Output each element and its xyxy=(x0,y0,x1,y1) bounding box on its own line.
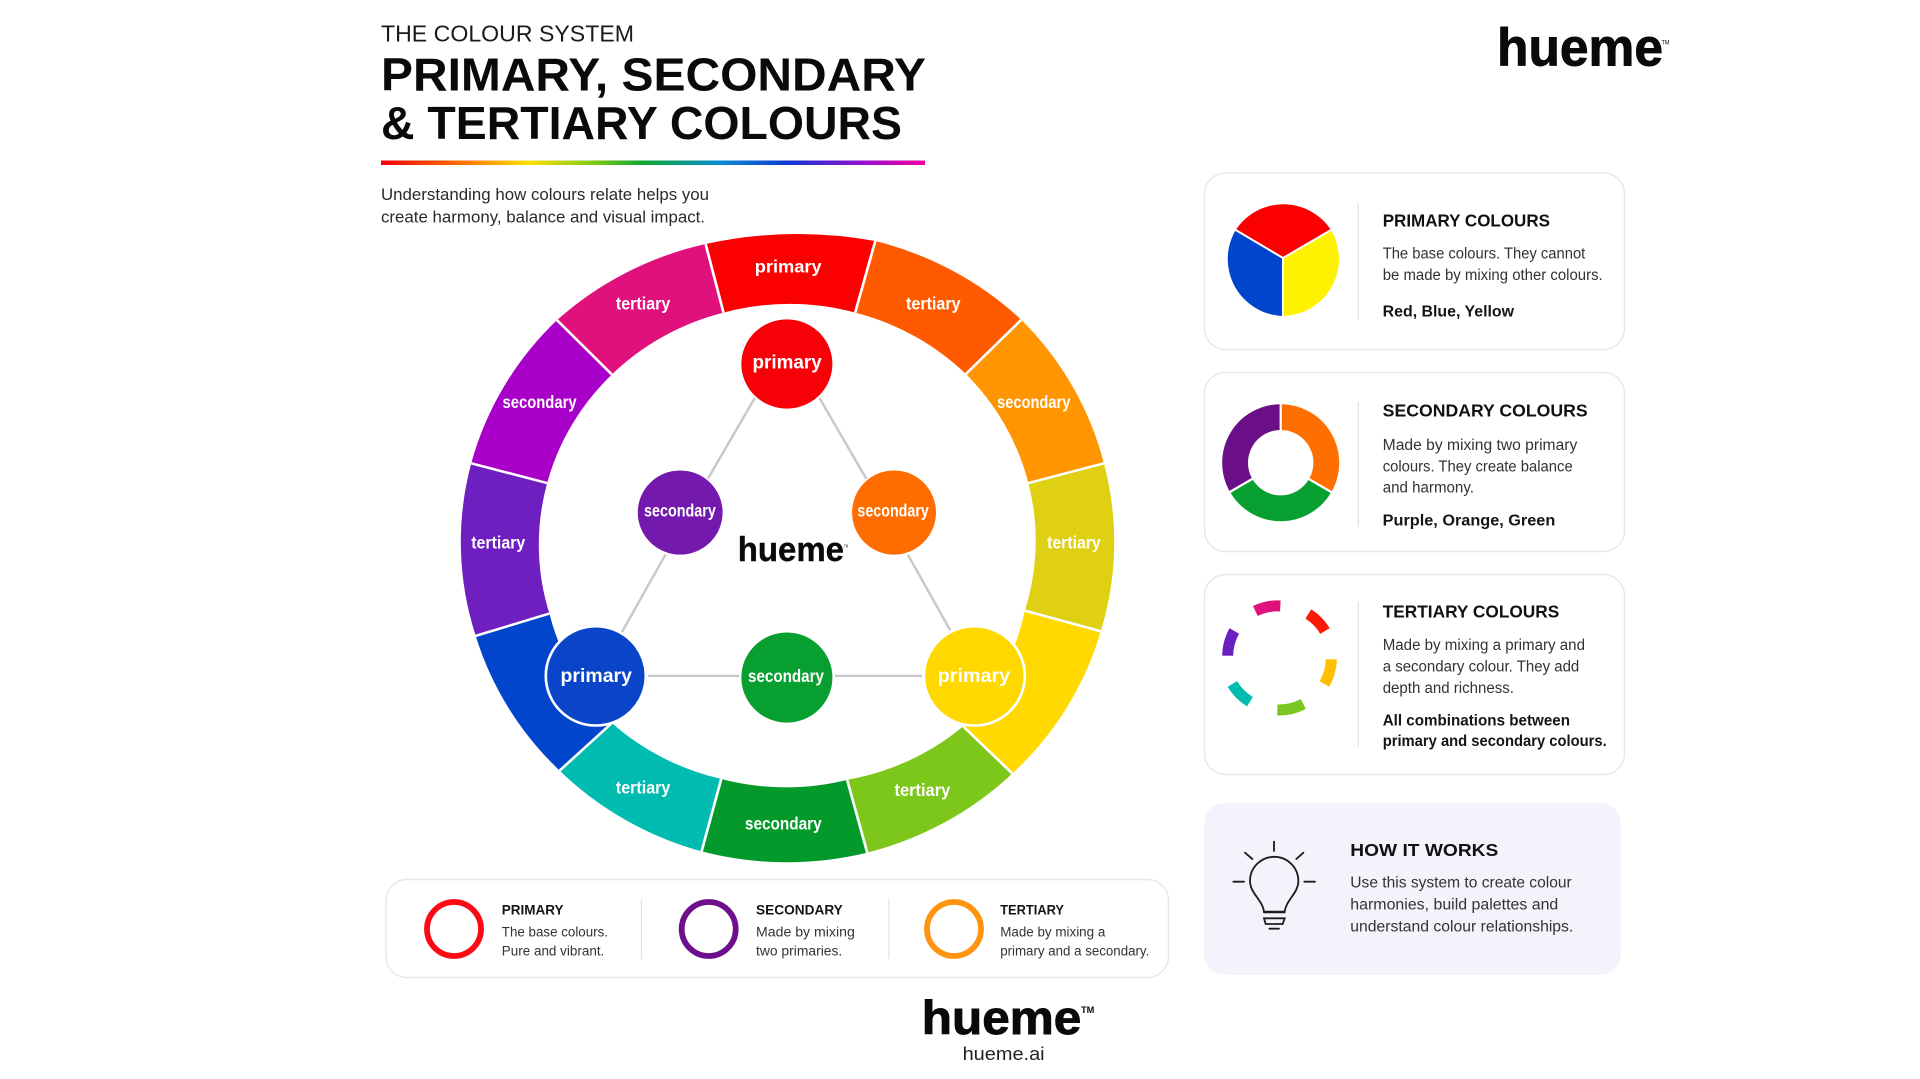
node: secondary purple: secondary xyxy=(644,501,716,521)
wheel ring labels: secondary xyxy=(503,393,577,412)
intro text xyxy=(381,186,709,227)
legend item: primary: PRIMARY xyxy=(502,901,564,917)
node: primary red xyxy=(741,319,832,409)
tertiary text: a secondary colour. They add xyxy=(1383,658,1579,675)
subtitle: the colour system: THE COLOUR SYSTEM xyxy=(381,21,634,47)
node: secondary purple xyxy=(638,470,723,555)
wheel ring labels: tertiary xyxy=(471,533,525,553)
panel: tertiary colours xyxy=(1204,574,1624,774)
node: primary red: primary xyxy=(753,352,822,373)
wheel ring labels: secondary xyxy=(997,393,1070,412)
node: primary blue: primary xyxy=(561,666,633,687)
segment: secondary green xyxy=(702,779,867,862)
legend item: tertiary: TERTIARY xyxy=(1000,901,1065,917)
wheel ring labels: tertiary xyxy=(616,294,670,314)
logo: hueme footer: TM xyxy=(1081,1005,1094,1016)
secondary text: SECONDARY COLOURS xyxy=(1383,401,1588,421)
footer url: hueme.ai xyxy=(963,1043,1045,1064)
logo: hueme footer: hueme xyxy=(922,991,1081,1044)
segment: secondary orange xyxy=(966,320,1104,483)
icon: primary pie xyxy=(1228,204,1339,316)
node: primary yellow xyxy=(924,626,1025,726)
legend item: primary: The base colours. xyxy=(502,925,608,940)
icon: light bulb xyxy=(1233,842,1315,929)
secondary text: colours. They create balance xyxy=(1383,458,1573,475)
tertiary text xyxy=(1383,601,1607,750)
how it works text: HOW IT WORKS xyxy=(1350,840,1498,860)
legend item: tertiary: Made by mixing a xyxy=(1000,925,1106,940)
segment: tertiary magenta xyxy=(557,244,723,374)
tertiary text: primary and secondary colours. xyxy=(1383,733,1607,750)
secondary text: Made by mixing two primary xyxy=(1383,437,1578,454)
primary text: The base colours. They cannot xyxy=(1383,246,1586,263)
logo: hueme top right: TM xyxy=(1662,40,1670,46)
rainbow rule xyxy=(381,160,925,165)
wheel ring labels: tertiary xyxy=(894,780,950,800)
legend panel xyxy=(386,880,1168,978)
tertiary text: Made by mixing a primary and xyxy=(1383,637,1585,654)
secondary text xyxy=(1383,401,1588,529)
wheel ring labels: secondary xyxy=(745,814,822,833)
tertiary text: depth and richness. xyxy=(1383,680,1514,697)
how it works text xyxy=(1350,840,1573,935)
legend item: secondary: SECONDARY xyxy=(756,901,843,917)
how it works text: Use this system to create colour xyxy=(1350,874,1572,891)
panel: how it works xyxy=(1204,803,1621,975)
node: secondary green: secondary xyxy=(748,667,824,686)
wheel ring labels: tertiary xyxy=(1047,533,1101,553)
logo: hueme top right: hueme xyxy=(1497,18,1663,77)
how it works text: harmonies, build palettes and xyxy=(1350,896,1558,913)
triangle connector lines xyxy=(622,398,950,676)
tertiary text: All combinations between xyxy=(1383,712,1570,729)
primary text: be made by mixing other colours. xyxy=(1383,267,1603,284)
logo: hueme wheel centre: hueme xyxy=(738,530,844,569)
node: primary blue xyxy=(546,626,646,726)
secondary text: Purple, Orange, Green xyxy=(1383,512,1555,529)
title xyxy=(381,48,926,149)
segment: tertiary teal xyxy=(560,723,721,851)
node: primary yellow: primary xyxy=(938,666,1011,687)
segment: tertiary yellow-olive xyxy=(1025,463,1114,631)
primary text xyxy=(1383,211,1603,321)
intro text: Understanding how colours relate helps you xyxy=(381,186,709,204)
legend item: primary: Pure and vibrant. xyxy=(502,943,604,958)
primary text: Red, Blue, Yellow xyxy=(1383,304,1515,321)
icon: tertiary dashes xyxy=(1228,606,1331,710)
segment: secondary purple xyxy=(471,320,612,483)
legend item: secondary xyxy=(682,901,855,958)
title: & TERTIARY COLOURS xyxy=(381,97,902,149)
node: secondary green xyxy=(741,633,832,723)
secondary text: and harmony. xyxy=(1383,480,1474,497)
how it works text: understand colour relationships. xyxy=(1350,918,1573,935)
legend item: secondary: Made by mixing xyxy=(756,925,855,940)
legend item: tertiary: primary and a secondary. xyxy=(1000,943,1149,958)
legend item: secondary: two primaries. xyxy=(756,943,842,958)
colour wheel xyxy=(461,234,1114,862)
icon: secondary donut xyxy=(1229,403,1332,508)
intro text: create harmony, balance and visual impact. xyxy=(381,209,705,227)
panel: secondary colours xyxy=(1204,372,1624,552)
panel: primary colours xyxy=(1204,173,1624,350)
wheel ring labels xyxy=(471,257,1101,833)
title: PRIMARY, SECONDARY xyxy=(381,48,926,100)
node: secondary orange: secondary xyxy=(857,501,929,521)
segment: primary red xyxy=(706,234,875,313)
wheel ring labels: tertiary xyxy=(616,778,670,798)
segment: tertiary violet xyxy=(461,463,549,636)
legend item: primary xyxy=(427,901,608,958)
node: secondary orange xyxy=(852,470,936,555)
segment: primary yellow xyxy=(963,611,1101,774)
tertiary text: TERTIARY COLOURS xyxy=(1383,601,1559,621)
primary text: PRIMARY COLOURS xyxy=(1383,211,1550,231)
segment: primary blue xyxy=(476,614,612,771)
logo: hueme wheel centre: TM xyxy=(844,544,848,548)
legend item: tertiary xyxy=(927,901,1149,958)
wheel ring labels: primary xyxy=(755,257,822,276)
wheel ring labels: tertiary xyxy=(906,294,961,314)
segment: tertiary lime xyxy=(847,726,1012,853)
segment: tertiary red-orange xyxy=(855,241,1021,374)
